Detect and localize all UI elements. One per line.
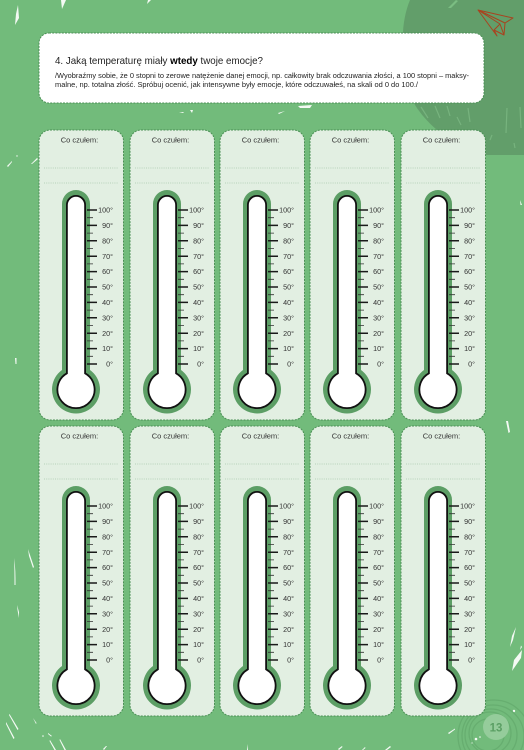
card: row 1 column 3: 30° [283, 313, 294, 322]
card: row 1 column 1: Co czułem: [61, 136, 98, 144]
card: row 2 column 4: 60° [373, 563, 384, 572]
card: row 2 column 5: 60° [464, 563, 475, 572]
card: row 1 column 4: Co czułem: [332, 136, 369, 144]
explanation text [55, 73, 470, 89]
card: row 1 column 2: 10° [193, 344, 204, 353]
page number badge: 13 [490, 722, 502, 734]
card: row 2 column 3: 60° [283, 563, 294, 572]
card: row 2 column 5: 40° [464, 594, 475, 603]
card: row 1 column 3: 80° [283, 236, 294, 245]
card: row 2 column 4: 100° [369, 502, 384, 510]
card: row 1 column 5 [401, 130, 486, 420]
card: row 2 column 3: 10° [283, 640, 294, 649]
card: row 2 column 4: 10° [373, 640, 384, 649]
card: row 2 column 2: 70° [193, 548, 204, 557]
explanation text: malne, np. totalna złość. Spróbuj ocenić, jak intensywne były emocje, które odczuwałeś, na skali od 0 do 100./ [55, 82, 418, 89]
card: row 1 column 3: 70° [283, 252, 294, 261]
card: row 1 column 2: 60° [193, 267, 204, 276]
card: row 2 column 4: 20° [373, 625, 384, 634]
card: row 2 column 4: 90° [373, 517, 384, 526]
card: row 2 column 5: 10° [464, 640, 475, 649]
card: row 1 column 5: 60° [464, 267, 475, 276]
card: row 2 column 1: 50° [102, 579, 113, 588]
card: row 1 column 2: 20° [193, 329, 204, 338]
card: row 2 column 1: Co czułem: [61, 432, 98, 440]
card: row 2 column 5 [401, 426, 486, 716]
card: row 1 column 4: 100° [369, 206, 384, 214]
card: row 2 column 3: 50° [283, 579, 294, 588]
card: row 1 column 2: 30° [193, 313, 204, 322]
card: row 2 column 5: 0° [468, 656, 475, 665]
card: row 1 column 3: 60° [283, 267, 294, 276]
card: row 2 column 4: 80° [373, 532, 384, 541]
card: row 2 column 3: 0° [287, 656, 294, 665]
card: row 1 column 5: 0° [468, 360, 475, 369]
card: row 1 column 5: 20° [464, 329, 475, 338]
card: row 2 column 2 [130, 426, 214, 716]
card: row 1 column 2: Co czułem: [152, 136, 189, 144]
card: row 1 column 5: 100° [460, 206, 475, 214]
card: row 2 column 5: 70° [464, 548, 475, 557]
card: row 1 column 4: 10° [373, 344, 384, 353]
card: row 2 column 5: 30° [464, 609, 475, 618]
card: row 2 column 2: 80° [193, 532, 204, 541]
card: row 1 column 5: 50° [464, 283, 475, 292]
card: row 2 column 5: 20° [464, 625, 475, 634]
card: row 2 column 1: 30° [102, 609, 113, 618]
card: row 1 column 4: 30° [373, 313, 384, 322]
card: row 1 column 1: 20° [102, 329, 113, 338]
card: row 1 column 4: 20° [373, 329, 384, 338]
card: row 1 column 3: 10° [283, 344, 294, 353]
card: row 2 column 2: 20° [193, 625, 204, 634]
card: row 1 column 5: 70° [464, 252, 475, 261]
card: row 1 column 5: 10° [464, 344, 475, 353]
card: row 1 column 4 [310, 130, 394, 420]
card: row 1 column 4: 60° [373, 267, 384, 276]
page number rings [458, 700, 524, 750]
card: row 2 column 4 [310, 426, 394, 716]
card: row 2 column 4: 40° [373, 594, 384, 603]
card: row 2 column 2: 40° [193, 594, 204, 603]
card: row 1 column 4: 80° [373, 236, 384, 245]
card: row 2 column 1: 100° [98, 502, 113, 510]
card: row 2 column 4: 30° [373, 609, 384, 618]
card: row 2 column 2: 50° [193, 579, 204, 588]
card: row 1 column 5: 80° [464, 236, 475, 245]
card: row 2 column 3: 30° [283, 609, 294, 618]
card: row 1 column 3 [220, 130, 304, 420]
card: row 1 column 2: 100° [189, 206, 204, 214]
card: row 1 column 1: 40° [102, 298, 113, 307]
card: row 1 column 4: 40° [373, 298, 384, 307]
card: row 1 column 1: 30° [102, 313, 113, 322]
card: row 1 column 1: 90° [102, 221, 113, 230]
ring sparkles [471, 736, 481, 744]
card: row 1 column 1: 70° [102, 252, 113, 261]
card: row 1 column 2: 80° [193, 236, 204, 245]
card: row 1 column 2: 70° [193, 252, 204, 261]
card: row 2 column 2: 100° [189, 502, 204, 510]
card: row 2 column 2: Co czułem: [152, 432, 189, 440]
icon: paper plane [478, 10, 513, 36]
card: row 1 column 3: 100° [279, 206, 294, 214]
card: row 1 column 3: 40° [283, 298, 294, 307]
card: row 1 column 1: 0° [106, 360, 113, 369]
card: row 1 column 1: 80° [102, 236, 113, 245]
card: row 1 column 3: 20° [283, 329, 294, 338]
card: row 1 column 2: 0° [197, 360, 204, 369]
card: row 2 column 3: 40° [283, 594, 294, 603]
card: row 1 column 4: 70° [373, 252, 384, 261]
card: row 1 column 4: 50° [373, 283, 384, 292]
card: row 2 column 1: 90° [102, 517, 113, 526]
card: row 2 column 2: 30° [193, 609, 204, 618]
card: row 2 column 5: 50° [464, 579, 475, 588]
card: row 2 column 5: 100° [460, 502, 475, 510]
card: row 1 column 5: Co czułem: [423, 136, 460, 144]
card: row 1 column 5: 40° [464, 298, 475, 307]
card: row 2 column 3: Co czułem: [242, 432, 279, 440]
heading: 4. Jaką temperaturę miały wtedy twoje emocje? [55, 55, 263, 67]
card: row 2 column 2: 90° [193, 517, 204, 526]
card: row 1 column 3: 0° [287, 360, 294, 369]
card: row 1 column 2: 40° [193, 298, 204, 307]
card: row 1 column 5: 90° [464, 221, 475, 230]
card: row 2 column 1: 0° [106, 656, 113, 665]
card: row 1 column 5: 30° [464, 313, 475, 322]
card: row 2 column 3: 20° [283, 625, 294, 634]
card: row 2 column 4: Co czułem: [332, 432, 369, 440]
card: row 1 column 1: 10° [102, 344, 113, 353]
explanation text: /Wyobraźmy sobie, że 0 stopni to zerowe natężenie danej emocji, np. całkowity brak odczuwania złości, a 100 stopni – maksy- [55, 73, 470, 80]
card: row 1 column 1 [39, 130, 124, 420]
card: row 2 column 5: 90° [464, 517, 475, 526]
card: row 1 column 1: 100° [98, 206, 113, 214]
card: row 1 column 4: 90° [373, 221, 384, 230]
card: row 1 column 2: 50° [193, 283, 204, 292]
card: row 2 column 1: 10° [102, 640, 113, 649]
card: row 1 column 1: 50° [102, 283, 113, 292]
card: row 2 column 1: 60° [102, 563, 113, 572]
card: row 1 column 2 [130, 130, 214, 420]
card: row 2 column 4: 50° [373, 579, 384, 588]
card: row 2 column 3 [220, 426, 304, 716]
card: row 2 column 3: 90° [283, 517, 294, 526]
card: row 2 column 4: 0° [377, 656, 384, 665]
card: row 2 column 3: 100° [279, 502, 294, 510]
card: row 2 column 5: 80° [464, 532, 475, 541]
card: row 2 column 1: 70° [102, 548, 113, 557]
card: row 2 column 1 [39, 426, 124, 716]
card: row 2 column 1: 80° [102, 532, 113, 541]
card: row 1 column 3: 50° [283, 283, 294, 292]
card: row 2 column 1: 40° [102, 594, 113, 603]
card: row 2 column 2: 10° [193, 640, 204, 649]
card: row 1 column 4: 0° [377, 360, 384, 369]
card: row 1 column 3: 90° [283, 221, 294, 230]
dark green blob top right [403, 0, 524, 155]
card: row 1 column 2: 90° [193, 221, 204, 230]
instruction panel [39, 33, 484, 103]
card: row 2 column 2: 0° [197, 656, 204, 665]
page number badge [483, 714, 509, 740]
card: row 2 column 3: 70° [283, 548, 294, 557]
card: row 2 column 5: Co czułem: [423, 432, 460, 440]
card: row 2 column 3: 80° [283, 532, 294, 541]
card: row 2 column 1: 20° [102, 625, 113, 634]
card: row 2 column 2: 60° [193, 563, 204, 572]
card: row 2 column 4: 70° [373, 548, 384, 557]
card: row 1 column 3: Co czułem: [242, 136, 279, 144]
card: row 1 column 1: 60° [102, 267, 113, 276]
